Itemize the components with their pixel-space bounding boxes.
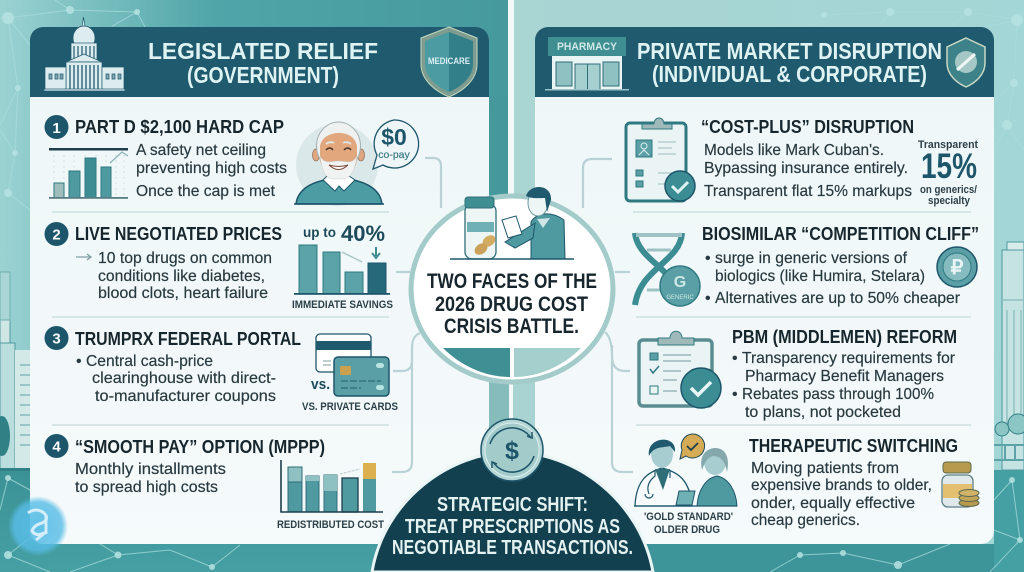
banner text: STRATEGIC SHIFT: bbox=[437, 494, 588, 516]
body text 1: preventing high costs bbox=[136, 160, 287, 177]
item 2: live negotiated prices bbox=[44, 221, 393, 311]
body text: therapeutic: Moving patients from bbox=[751, 460, 899, 477]
chart: up to 40% savings: up to bbox=[303, 225, 336, 240]
body text 2: blood clots, heart failure bbox=[98, 285, 268, 302]
chart label: redistributed cost: REDISTRIBUTED COST bbox=[277, 519, 384, 531]
number badge 2 bbox=[44, 222, 68, 246]
body text 3 bbox=[76, 353, 276, 405]
center title bbox=[427, 270, 597, 338]
body text 3: clearinghouse with direct- bbox=[92, 370, 276, 387]
icon: capitol building bbox=[44, 17, 125, 91]
arrow: bullet bbox=[76, 254, 91, 260]
body text: therapeutic: onder, equally effective bbox=[751, 495, 915, 512]
icon: private shield bbox=[947, 38, 985, 87]
icon: dollar cycle bbox=[481, 419, 543, 481]
number badge 4 bbox=[44, 434, 68, 458]
chart label: immediate savings: IMMEDIATE SAVINGS bbox=[292, 299, 393, 311]
icon: medicare shield: MEDICARE bbox=[428, 56, 470, 67]
item: therapeutic switching bbox=[634, 434, 979, 536]
chart: capped bars bbox=[49, 148, 128, 199]
background: city buildings left bbox=[0, 272, 30, 471]
body text: pbm bbox=[732, 350, 956, 421]
item title 4: “SMOOTH PAY” OPTION (MPPP) bbox=[75, 437, 325, 457]
body text 2: 10 top drugs on common bbox=[98, 250, 272, 267]
panel: private market disruption bbox=[392, 27, 994, 544]
number badge 3: 3 bbox=[52, 330, 61, 348]
background: right half bbox=[512, 0, 1024, 572]
body text: pbm: • bbox=[732, 350, 738, 367]
icon: dollar cycle: $ bbox=[505, 437, 519, 465]
banner text bbox=[392, 494, 633, 559]
callout: transparent 15%: on generics/ bbox=[920, 184, 977, 196]
center title: 2026 DRUG COST bbox=[435, 293, 588, 316]
banner text: TREAT PRESCRIPTIONS AS bbox=[405, 516, 620, 538]
background: bottom teal bands bbox=[0, 470, 1024, 572]
body text 3: to-manufacturer coupons bbox=[95, 388, 276, 405]
body text: cost-plus: Bypassing insurance entirely. bbox=[704, 160, 908, 177]
logo: bottom-left watermark bbox=[8, 496, 68, 556]
body text: biosimilar: surge in generic versions of bbox=[715, 250, 908, 267]
body text: cost-plus: Models like Mark Cuban's. bbox=[704, 142, 884, 159]
connector lines bbox=[392, 158, 633, 472]
item: cost-plus disruption bbox=[626, 117, 978, 207]
number badge 4: 4 bbox=[52, 438, 61, 456]
banner text: NEGOTIABLE TRANSACTIONS. bbox=[392, 537, 633, 559]
icon: smiling senior bbox=[294, 122, 384, 206]
body text: pbm: • bbox=[732, 386, 738, 403]
item title: cost-plus: “COST-PLUS” DISRUPTION bbox=[701, 117, 914, 137]
heading: legislated relief: LEGISLATED RELIEF bbox=[148, 38, 378, 64]
icon: dna with generic coin: GENERIC bbox=[666, 295, 694, 301]
number badge 1 bbox=[44, 115, 68, 139]
body text 2: conditions like diabetes, bbox=[98, 268, 265, 285]
lower teal segments bbox=[443, 348, 581, 377]
background: city buildings right bbox=[994, 242, 1024, 470]
speech bubble: gold check bbox=[680, 434, 705, 459]
item: biosimilar competition cliff bbox=[635, 224, 979, 307]
label: gold standard: OLDER DRUG bbox=[654, 524, 720, 536]
number badge 3 bbox=[44, 326, 68, 350]
heading: government: (GOVERNMENT) bbox=[187, 62, 339, 88]
body text 1: A safety net ceiling bbox=[136, 142, 266, 159]
icon: dna with generic coin: G bbox=[674, 274, 686, 291]
body text: cost-plus: Transparent flat 15% markups bbox=[704, 183, 912, 200]
icon: checklist clipboard bbox=[639, 331, 721, 408]
center spine: stems bbox=[489, 0, 535, 470]
panel: legislated relief (government) bbox=[30, 17, 489, 544]
item 4: smooth pay bbox=[44, 434, 384, 531]
ground line bbox=[450, 258, 574, 260]
panel body: right bbox=[535, 27, 994, 544]
body text 4: to spread high costs bbox=[75, 479, 218, 496]
icon: rupee coin bbox=[937, 247, 977, 287]
label: gold standard: 'GOLD STANDARD' bbox=[644, 511, 733, 523]
body text: therapeutic: cheap generics. bbox=[751, 512, 860, 529]
item title 2: LIVE NEGOTIATED PRICES bbox=[75, 224, 282, 244]
body text: pbm: to plans, not pocketed bbox=[745, 404, 901, 421]
background: network pattern bottom bbox=[0, 475, 1023, 572]
circle ring bbox=[411, 196, 613, 382]
chart: redistributed cost bbox=[281, 460, 383, 512]
body text: therapeutic bbox=[751, 460, 932, 529]
banner: strategic shift dome bbox=[372, 419, 653, 572]
heading: individual and corporate: (INDIVIDUAL & CORPORATE) bbox=[652, 61, 927, 87]
chart: up to 40% savings bbox=[294, 221, 390, 295]
icon: two cards bbox=[311, 334, 389, 396]
icon: clipboard with check bbox=[626, 118, 695, 201]
item title: biosimilar: BIOSIMILAR “COMPETITION CLIFF” bbox=[702, 224, 979, 244]
body text: cost-plus bbox=[704, 142, 912, 200]
panel header: right bbox=[535, 27, 994, 97]
body text: biosimilar: biologics (like Humira, Stelara) bbox=[715, 268, 925, 285]
chart label: vs private cards: VS. PRIVATE CARDS bbox=[302, 401, 398, 413]
panel body: left bbox=[30, 27, 489, 544]
body text 4: Monthly installments bbox=[75, 461, 226, 478]
body text: therapeutic: expensive brands to older, bbox=[751, 477, 932, 494]
item title: pbm: PBM (MIDDLEMEN) REFORM bbox=[732, 327, 957, 347]
callout: transparent 15% bbox=[918, 139, 978, 207]
background: network pattern top right bbox=[821, 8, 1024, 150]
body text 3: • bbox=[76, 353, 82, 370]
body text 2 bbox=[98, 250, 272, 302]
body text 4 bbox=[75, 461, 226, 496]
item title: therapeutic: THERAPEUTIC SWITCHING bbox=[749, 436, 958, 456]
body text: biosimilar bbox=[705, 250, 961, 307]
speech bubble: $0 co-pay bbox=[373, 120, 419, 169]
callout: transparent 15%: Transparent bbox=[918, 139, 978, 151]
callout: transparent 15%: 15% bbox=[921, 147, 977, 186]
center title: TWO FACES OF THE bbox=[427, 270, 597, 293]
icon: medicine bottle bbox=[465, 197, 498, 259]
body text: pbm: Rebates pass through 100% bbox=[742, 386, 934, 403]
number badge 1: 1 bbox=[52, 120, 61, 137]
label: gold standard bbox=[644, 511, 733, 536]
icon: pill bottle and coins bbox=[942, 462, 979, 507]
body text: biosimilar: • bbox=[705, 250, 711, 267]
icon: medicare shield bbox=[421, 27, 477, 97]
icon: rupee coin: ₽ bbox=[951, 257, 964, 279]
body text 3: Central cash-price bbox=[86, 353, 213, 370]
background: left half bbox=[0, 0, 510, 572]
chart: up to 40% savings: 40% bbox=[341, 221, 385, 246]
icon: pharmacy storefront: PHARMACY bbox=[557, 41, 618, 53]
body text: biosimilar: • bbox=[705, 290, 711, 307]
body text: pbm: Transparency requirements for bbox=[742, 350, 956, 367]
number badge 2: 2 bbox=[52, 226, 61, 244]
icon: person reading bbox=[502, 187, 565, 259]
item 1: part d cap bbox=[44, 115, 419, 206]
body text: biosimilar: Alternatives are up to 50% cheaper bbox=[715, 290, 961, 307]
item title 1: PART D $2,100 HARD CAP bbox=[75, 117, 284, 137]
center title: CRISIS BATTLE. bbox=[444, 315, 579, 338]
heading: private market disruption: PRIVATE MARKET DISRUPTION bbox=[637, 38, 942, 64]
item title 3: TRUMPRX FEDERAL PORTAL bbox=[75, 329, 301, 349]
callout: transparent 15%: specialty bbox=[928, 195, 971, 207]
item 3: trumprx portal bbox=[44, 326, 398, 413]
dome shape bbox=[372, 452, 653, 572]
item: pbm reform bbox=[639, 327, 957, 421]
icon: dna with generic coin bbox=[635, 233, 700, 306]
icon: two cards: vs. bbox=[311, 376, 330, 393]
center circle: two faces bbox=[411, 187, 613, 382]
body text: pbm: Pharmacy Benefit Managers bbox=[745, 368, 944, 385]
panel header: left bbox=[30, 27, 489, 97]
icon: pharmacy storefront bbox=[545, 37, 629, 90]
speech bubble: $0 co-pay: $0 bbox=[381, 124, 407, 150]
speech bubble: $0 co-pay: co-pay bbox=[378, 149, 411, 161]
background: network pattern top left bbox=[0, 0, 145, 210]
body text 1 bbox=[136, 142, 287, 200]
body text 1: Once the cap is met bbox=[136, 183, 276, 200]
icon: doctor and patient bbox=[634, 440, 737, 506]
